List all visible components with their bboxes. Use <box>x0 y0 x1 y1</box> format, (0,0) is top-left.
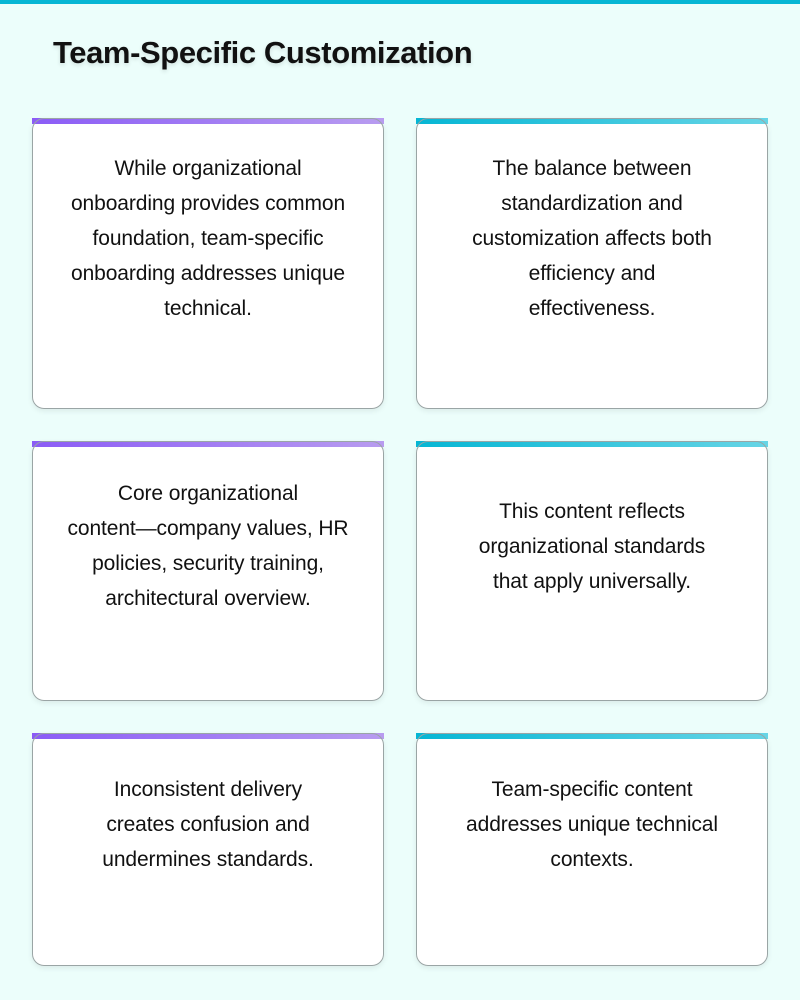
purple card accent bar <box>32 118 384 124</box>
text: team-specific content: contexts. <box>550 848 634 870</box>
text: organizational onboarding: onboarding provides common <box>71 192 345 214</box>
panel: card 3 <box>32 441 384 701</box>
text: team-specific content <box>466 778 718 870</box>
panel: card 1 <box>32 118 384 409</box>
text: balance: efficiency and <box>529 262 655 284</box>
purple card accent bar <box>32 441 384 447</box>
title: Team-Specific Customization <box>53 35 472 70</box>
text: core content: policies, security training, <box>92 552 324 574</box>
text: inconsistent delivery: undermines standards. <box>102 848 314 870</box>
text: balance: customization affects both <box>472 226 712 250</box>
teal card accent bar <box>416 441 768 447</box>
text: balance: The balance between <box>493 156 691 180</box>
text: organizational onboarding: foundation, team-specific <box>93 226 323 250</box>
teal card accent bar <box>416 733 768 739</box>
text: team-specific content: Team-specific content <box>492 778 692 800</box>
text: standards: that apply universally. <box>493 570 691 592</box>
teal card accent bar <box>416 118 768 124</box>
text: inconsistent delivery: creates confusion and <box>106 812 310 836</box>
top accent bar <box>0 0 800 4</box>
text: core content: architectural overview. <box>105 586 311 610</box>
text: standards: This content reflects <box>499 500 685 522</box>
text: standards: organizational standards <box>479 534 705 558</box>
text: team-specific content: addresses unique technical <box>466 812 718 836</box>
text: organizational onboarding: onboarding addresses unique <box>71 262 345 284</box>
text: organizational onboarding <box>71 156 345 320</box>
text: inconsistent delivery <box>102 778 314 870</box>
panel: card 6 <box>416 733 768 966</box>
text: organizational onboarding: While organizational <box>114 156 302 180</box>
text: core content: Core organizational <box>118 482 298 504</box>
text: organizational onboarding: technical. <box>164 296 252 320</box>
text: standards <box>479 500 705 592</box>
text: balance <box>472 156 712 320</box>
text: inconsistent delivery: Inconsistent delivery <box>114 778 302 800</box>
text: balance: effectiveness. <box>529 296 655 320</box>
panel: card 5 <box>32 733 384 966</box>
text: balance: standardization and <box>501 192 683 214</box>
panel: card 4 <box>416 441 768 701</box>
text: core content: content—company values, HR <box>67 516 349 540</box>
panel: card 2 <box>416 118 768 409</box>
purple card accent bar <box>32 733 384 739</box>
text: core content <box>67 482 349 610</box>
